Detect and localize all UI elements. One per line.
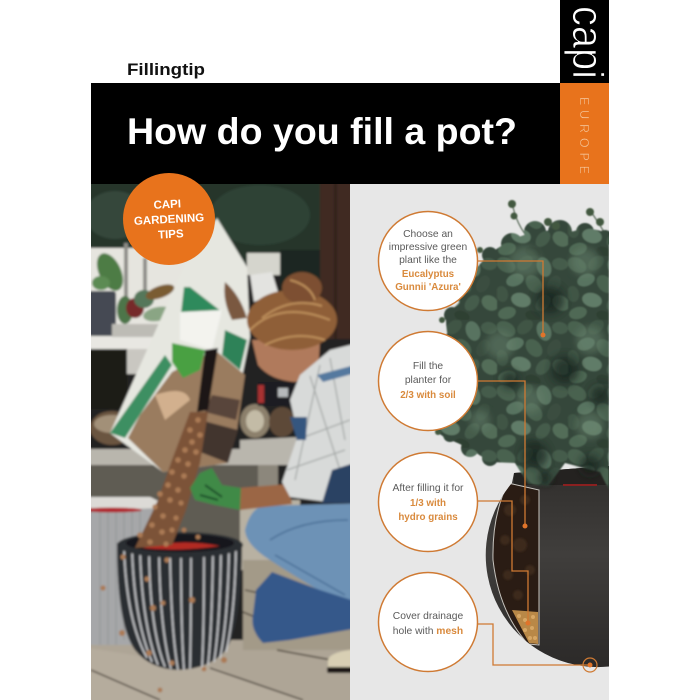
callout: choose plant: Choose an: [403, 229, 453, 240]
white kitchen wall and counter: [70, 243, 280, 409]
badge: Capi gardening tips: CAPI: [153, 198, 181, 212]
callout: soil: planter for: [405, 375, 452, 386]
hydro grains layer: [512, 610, 538, 644]
logo: capi Europe: [560, 0, 612, 184]
wooden deck: [91, 560, 350, 700]
callout: choose plant: Eucalyptus: [402, 269, 455, 280]
callout: hydro grains: hydro grains: [398, 512, 458, 523]
badge: Capi gardening tips: GARDENING: [134, 212, 205, 228]
garden background: [91, 184, 350, 340]
shelf and under-shelf wall: [70, 382, 300, 570]
callout: choose plant: impressive green: [389, 242, 467, 253]
logo subline: EUROPE: [577, 97, 591, 174]
callout: hydro grains: After filling it for: [393, 483, 464, 494]
grey planter: [91, 495, 160, 646]
hair: [247, 290, 337, 350]
infographic canvas: [91, 0, 609, 700]
glove: [190, 468, 241, 510]
apron: [322, 463, 350, 504]
heading: Fillingtip: Fillingtip: [127, 60, 205, 79]
badge: Capi gardening tips: TIPS: [158, 228, 184, 242]
logo wordmark: capi: [563, 6, 612, 79]
face: [252, 340, 320, 382]
potted plant on the counter: [91, 252, 176, 338]
bag of hydro grains: [110, 218, 278, 472]
falling hydro grains: [100, 412, 227, 692]
shoe: [326, 649, 350, 669]
shirt: [280, 343, 350, 503]
arm: [238, 484, 292, 510]
badge: Capi gardening tips: [123, 173, 215, 265]
plant: eucalyptus: [432, 200, 613, 490]
panel: how-to diagram: [350, 184, 613, 700]
callout: soil: 2/3 with soil: [400, 390, 456, 401]
callout: choose plant: Gunnii 'Azura': [395, 282, 461, 293]
callout: hydro grains: 1/3 with: [410, 498, 446, 509]
callout: soil: [378, 332, 478, 430]
callout: mesh: hole with mesh: [393, 626, 463, 637]
callout: hydro grains: [378, 452, 478, 552]
soil cutaway: [493, 483, 539, 645]
planter cutaway: [480, 460, 609, 670]
leader lines: [478, 261, 597, 672]
callout: soil: Fill the: [413, 361, 443, 372]
title band: [91, 83, 560, 184]
callout: mesh: [378, 572, 478, 672]
title: How do you fill a pot?: [127, 111, 517, 152]
foliage light and shadow patches: [470, 246, 609, 485]
jeans: [244, 502, 350, 601]
callout: choose plant: [378, 212, 478, 310]
callout: choose plant: plant like the: [399, 255, 457, 266]
callout: mesh: Cover drainage: [393, 611, 463, 622]
woman kneeling: [190, 272, 370, 673]
striped planter: [117, 532, 243, 670]
panel: gardening photo: [91, 184, 350, 700]
